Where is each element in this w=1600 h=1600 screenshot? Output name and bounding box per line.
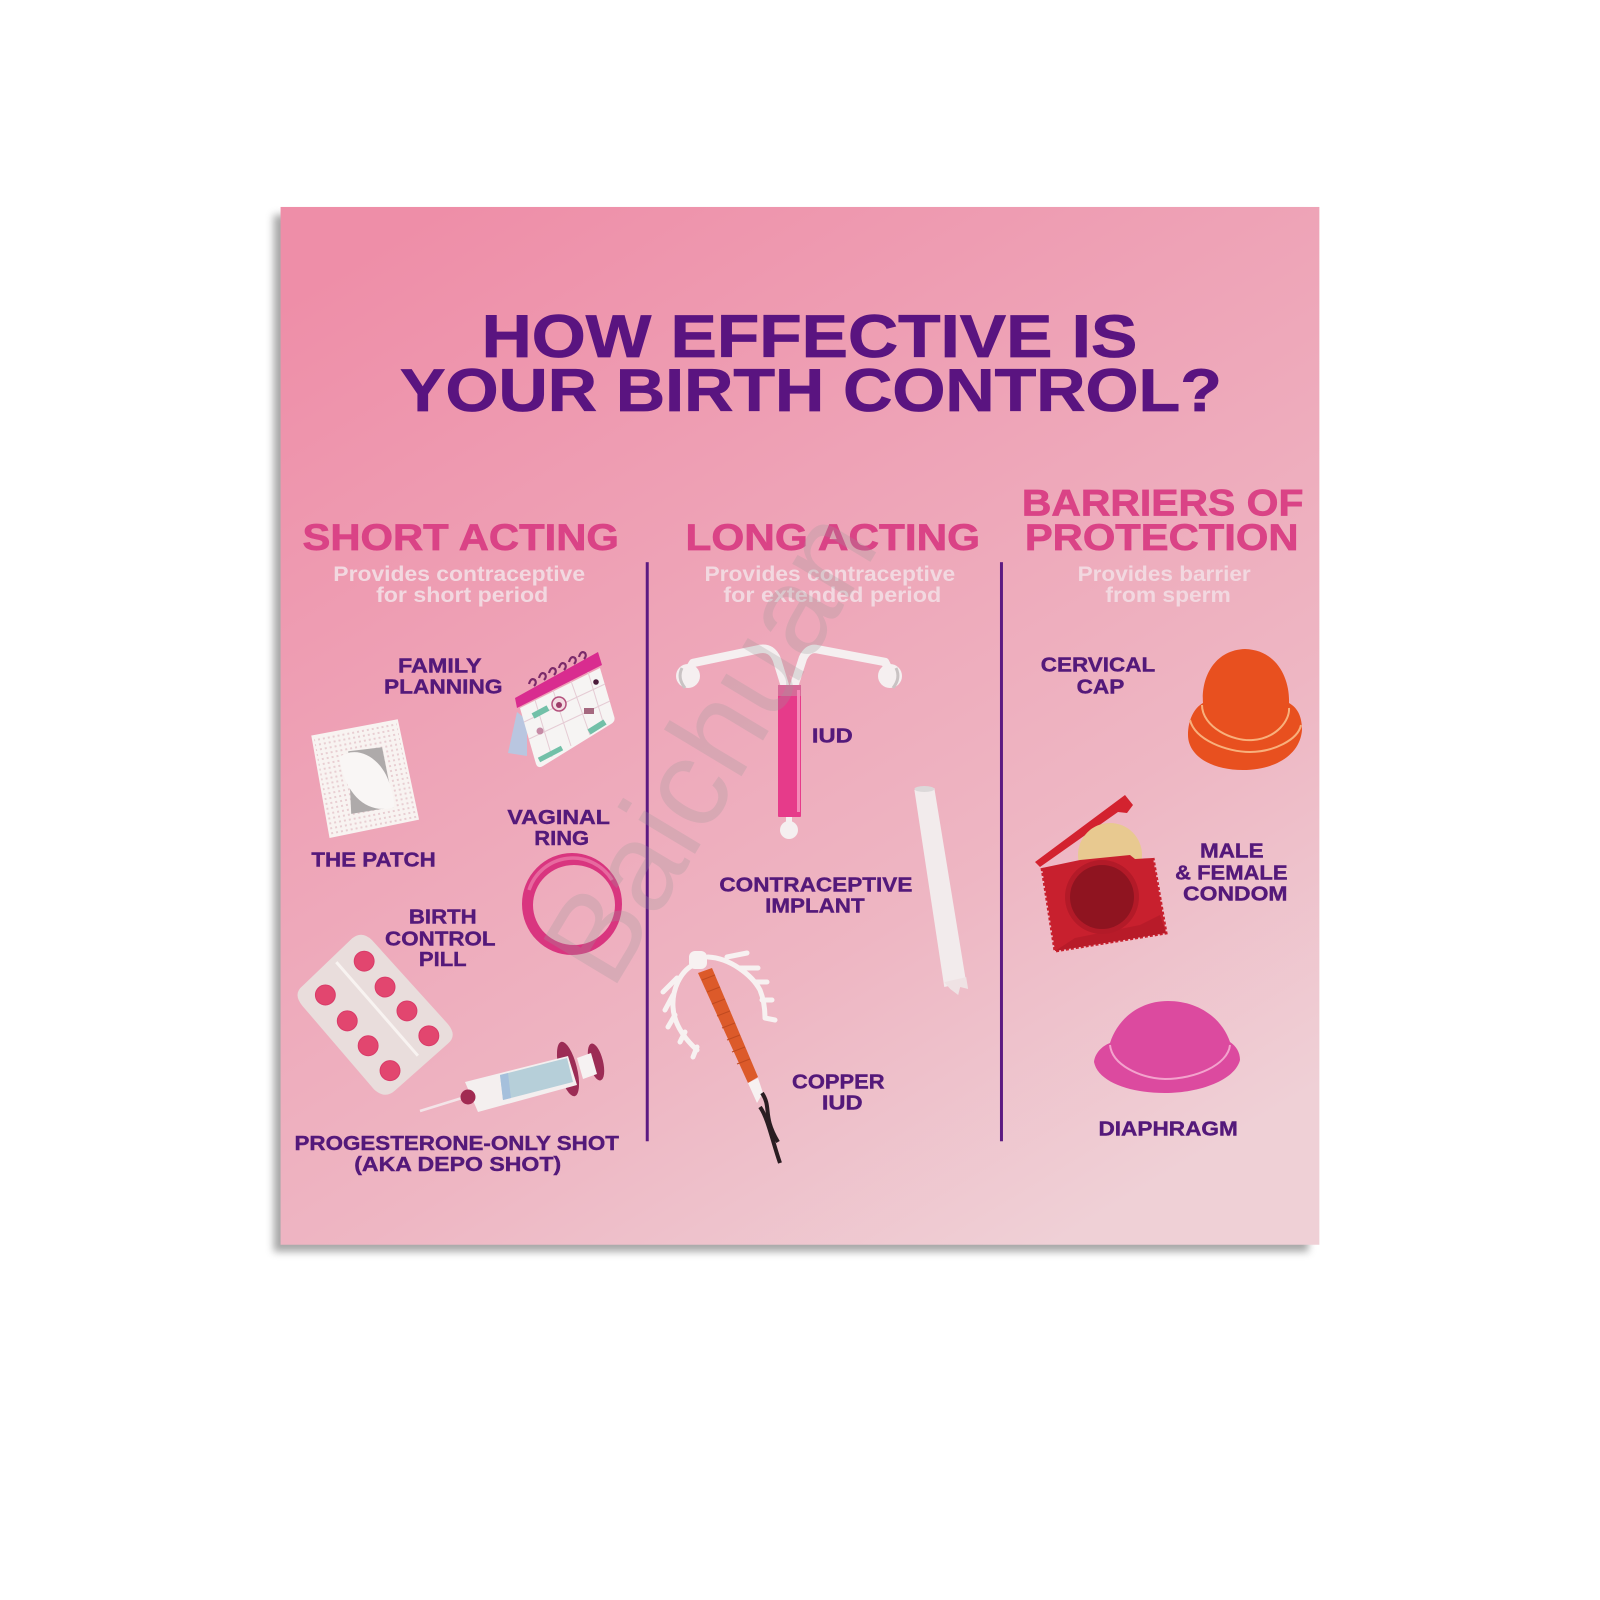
icon: cervical cap [1188,649,1302,770]
label: IUD: IUD [812,725,853,747]
label: progesterone-only shot: PROGESTERONE-ONLY SHOT [295,1133,619,1155]
label: vaginal ring [507,807,610,850]
heading: short acting: SHORT ACTING [302,516,619,558]
label: contraceptive implant [719,875,912,917]
label: male and female condom: CONDOM [1183,883,1288,905]
heading: long acting: LONG ACTING [686,516,980,558]
label: the patch: THE PATCH [311,850,436,872]
icon: pill blister pack [298,935,453,1095]
label: family planning [384,656,502,699]
icon: diaphragm [1094,1001,1240,1093]
label: vaginal ring: VAGINAL [507,807,610,829]
label: progesterone-only shot [295,1133,619,1176]
heading: barriers of protection: PROTECTION [1025,516,1298,558]
label: copper IUD: COPPER [792,1072,885,1094]
label: progesterone-only shot: (AKA DEPO SHOT) [354,1154,561,1176]
label: cervical cap: CAP [1077,677,1124,699]
title: YOUR BIRTH CONTROL? [400,356,1222,424]
heading: barriers of protection [1022,481,1303,607]
label: male and female condom: & FEMALE [1175,863,1288,885]
label: contraceptive implant: CONTRACEPTIVE [719,875,912,897]
label: family planning: FAMILY [398,656,482,678]
label: birth control pill: CONTROL [385,928,496,950]
heading: long acting [686,516,980,607]
heading: long acting: for extended period [723,584,941,607]
label: cervical cap: CERVICAL [1041,655,1155,677]
panel shadow [274,215,1308,1252]
label: male and female condom: MALE [1200,841,1264,863]
label: birth control pill [385,906,496,971]
heading: barriers of protection: Provides barrier [1078,563,1251,586]
watermark: Baichuan [516,488,903,1006]
label: vaginal ring: RING [534,828,589,850]
label: family planning: PLANNING [384,677,502,699]
poster panel background [281,207,1319,1245]
heading: short acting [302,516,619,607]
heading: short acting: for short period [376,584,548,607]
icon: copper IUD [663,951,780,1163]
title [400,302,1222,424]
label: birth control pill: BIRTH [409,906,477,928]
label: copper IUD: IUD [822,1092,863,1114]
title: HOW EFFECTIVE IS [482,302,1137,370]
icon: contraceptive implant [914,786,968,995]
icon: the patch [312,720,418,837]
icon: vaginal ring [522,853,622,955]
label: male and female condom [1175,841,1288,905]
heading: long acting: Provides contraceptive [704,563,955,586]
label: cervical cap [1041,655,1155,699]
heading: barriers of protection: BARRIERS OF [1022,481,1303,523]
label: diaphragm: DIAPHRAGM [1098,1118,1238,1140]
label: birth control pill: PILL [419,949,467,971]
heading: short acting: Provides contraceptive [333,563,585,586]
icon: syringe [420,1040,607,1112]
icon: condom packet [1035,795,1166,951]
label: copper IUD [792,1072,885,1114]
heading: barriers of protection: from sperm [1105,584,1231,607]
label: contraceptive implant: IMPLANT [765,895,865,917]
icon: calendar [508,652,615,767]
icon: IUD [676,649,902,839]
